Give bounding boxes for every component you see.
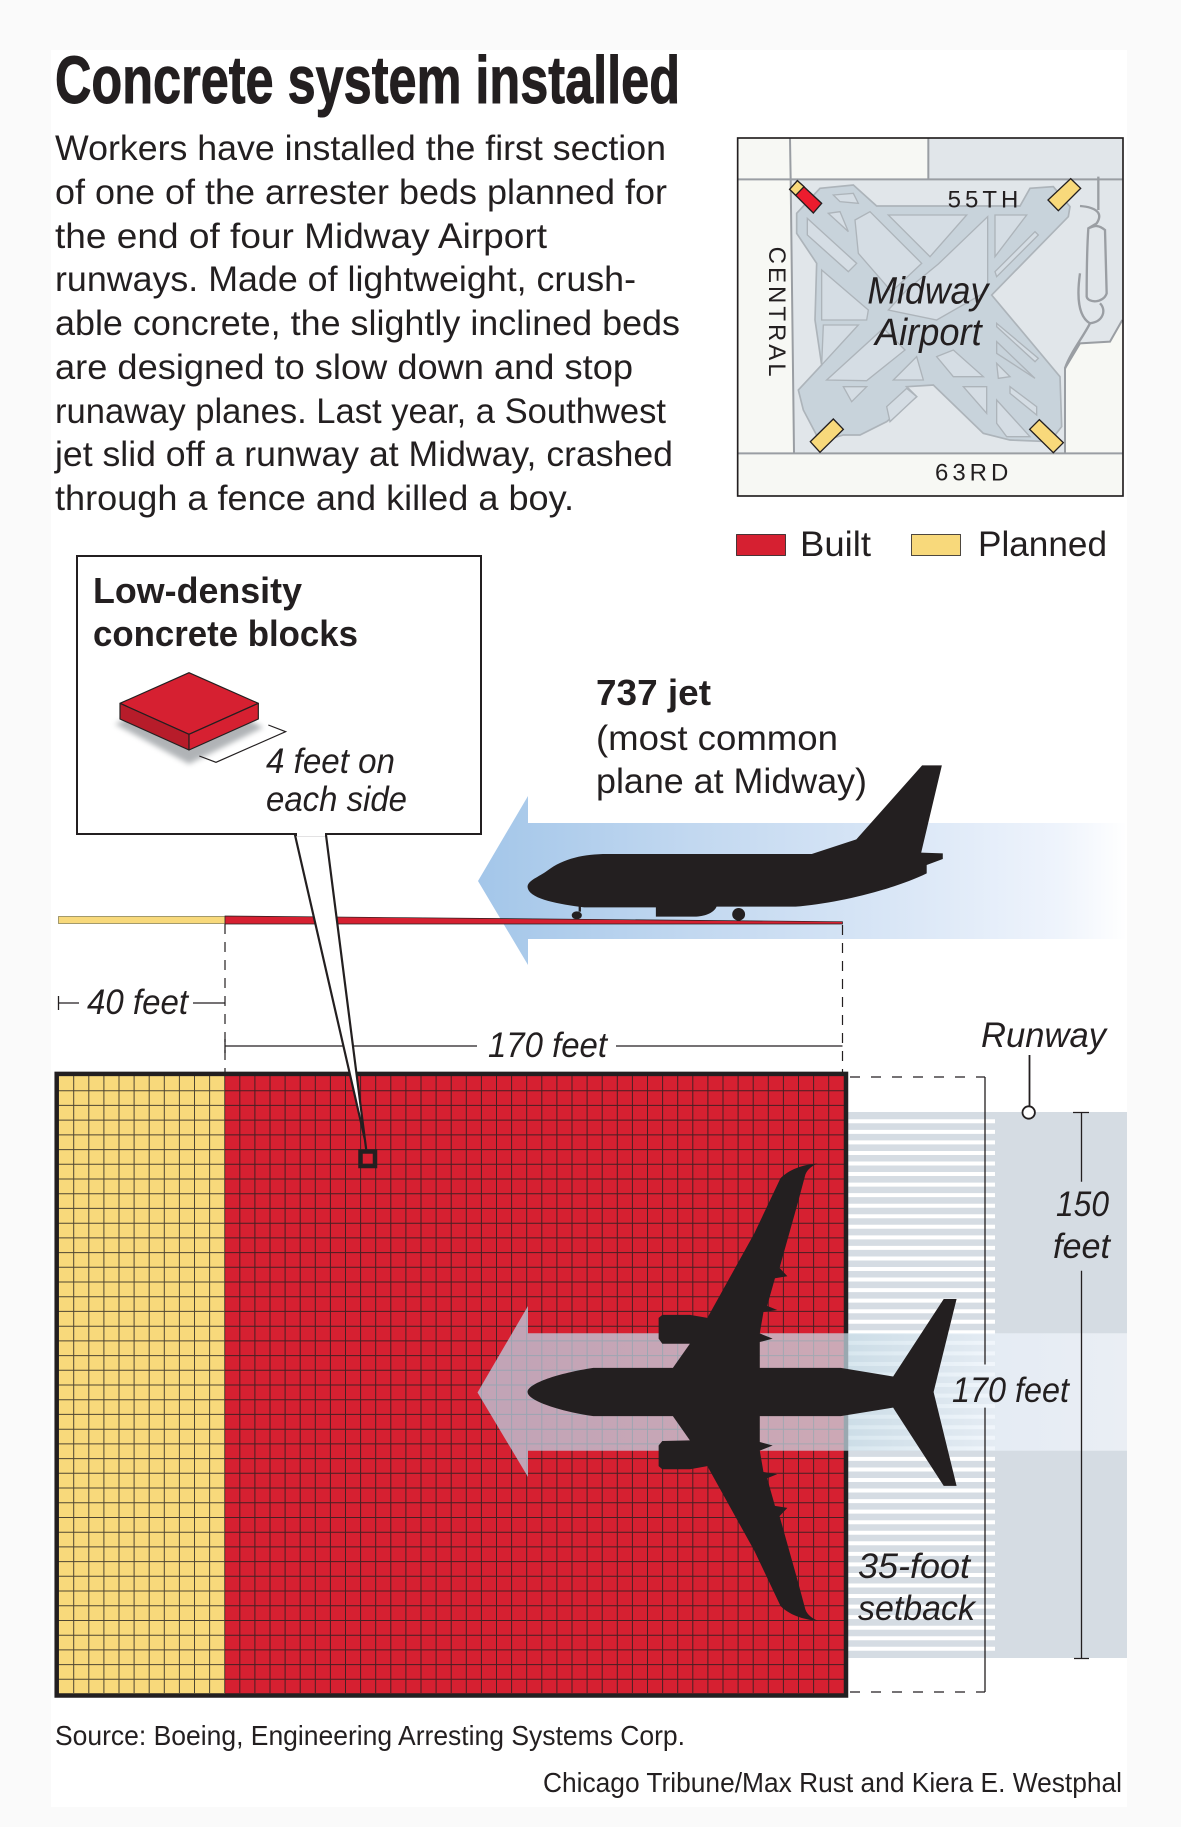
blue motion arrow behind side-view plane (478, 796, 1127, 965)
runway label with leader (981, 1016, 1108, 1119)
credit line: Chicago Tribune/Max Rust and Kiera E. Westphal (543, 1767, 1122, 1798)
bed side profile: planned section (58, 916, 225, 924)
arrester bed: northwest, part built (790, 181, 822, 213)
title: Concrete system installed (55, 43, 680, 118)
airport name (867, 270, 990, 354)
bed outer border (57, 1074, 846, 1696)
callout box (77, 556, 481, 834)
arrester bed: northeast (1048, 179, 1081, 211)
dimension: 170 feet length (225, 1026, 842, 1065)
intro text block: able concrete, the slightly inclined beds (55, 304, 680, 343)
legend (736, 525, 1107, 564)
runway width dimension (1073, 1112, 1089, 1658)
label: 150 feet: feet (1053, 1227, 1111, 1266)
intro text block (54, 129, 680, 518)
intro text block: runways. Made of lightweight, crush- (55, 260, 636, 299)
block size label: each side (266, 780, 407, 819)
icon: concrete block (115, 673, 286, 764)
label: 35-foot setback: 35-foot (858, 1547, 971, 1586)
dimension: 170 feet length: 170 feet (488, 1026, 608, 1065)
callout heading: concrete blocks (93, 613, 358, 654)
street label: Central: CENTRAL (763, 247, 790, 377)
setback dimension bracket (850, 1077, 985, 1692)
intro text block: through a fence and killed a boy. (55, 479, 574, 518)
label: 150 feet (1053, 1185, 1111, 1266)
block size label (266, 742, 407, 819)
map border (738, 138, 1123, 496)
street label: 63rd: 63RD (935, 460, 1008, 487)
intro text block: Workers have installed the first section (55, 129, 666, 168)
street label: 55th: 55TH (948, 187, 1018, 214)
dashed guide lines (225, 924, 842, 1075)
intro text block: of one of the arrester beds planned for (55, 173, 667, 212)
bed side profile: built wedge (225, 916, 842, 924)
source line: Source: Boeing, Engineering Arresting Systems Corp. (55, 1720, 685, 1751)
airport name: Airport (873, 312, 983, 354)
selected block marker (360, 1152, 375, 1166)
intro text block: jet slid off a runway at Midway, crashed (54, 435, 673, 474)
dimension: 40 feet (58, 983, 225, 1022)
dimension: 40 feet: 40 feet (87, 983, 189, 1022)
737 jet label: 737 jet (596, 672, 711, 713)
side-view 737 silhouette (528, 765, 943, 921)
block size label: 4 feet on (266, 742, 395, 781)
intro text block: the end of four Midway Airport (55, 217, 547, 256)
label: 170 feet width: 170 feet (952, 1371, 1070, 1410)
arrester bed: southwest (810, 419, 843, 452)
intro text block: runaway planes. Last year, a Southwest (55, 392, 666, 431)
setback stripes (848, 1119, 995, 1653)
legend swatch: built (736, 534, 786, 556)
top-view 737 silhouette (528, 1163, 957, 1621)
concrete block grid (58, 1076, 845, 1693)
runway label with leader: Runway (981, 1016, 1108, 1055)
737 jet label: plane at Midway) (596, 762, 867, 801)
legend swatch: planned (912, 534, 960, 556)
arrester bed plan: planned section (58, 1075, 225, 1694)
callout pointer (295, 835, 366, 1152)
label: 35-foot setback (858, 1547, 976, 1628)
737 jet label (596, 672, 867, 801)
airport name: Midway (867, 270, 990, 312)
label: 35-foot setback: setback (858, 1589, 976, 1628)
label: 150 feet: 150 (1056, 1185, 1109, 1224)
737 jet label: (most common (596, 719, 838, 758)
callout heading (93, 570, 358, 654)
arrester bed plan: built section (225, 1075, 845, 1694)
callout heading: Low-density (93, 570, 302, 611)
callout: low-density concrete blocks (77, 556, 481, 1166)
translucent motion arrow over plan view (478, 1306, 1127, 1477)
runway strip (848, 1112, 1127, 1658)
intro text block: are designed to slow down and stop (55, 348, 633, 387)
legend label: built: Built (800, 525, 871, 564)
legend label: planned: Planned (978, 525, 1107, 564)
arrester bed: southeast (1030, 420, 1063, 453)
locator map of Midway Airport (738, 138, 1123, 496)
pointer mouth cover (297, 833, 325, 836)
